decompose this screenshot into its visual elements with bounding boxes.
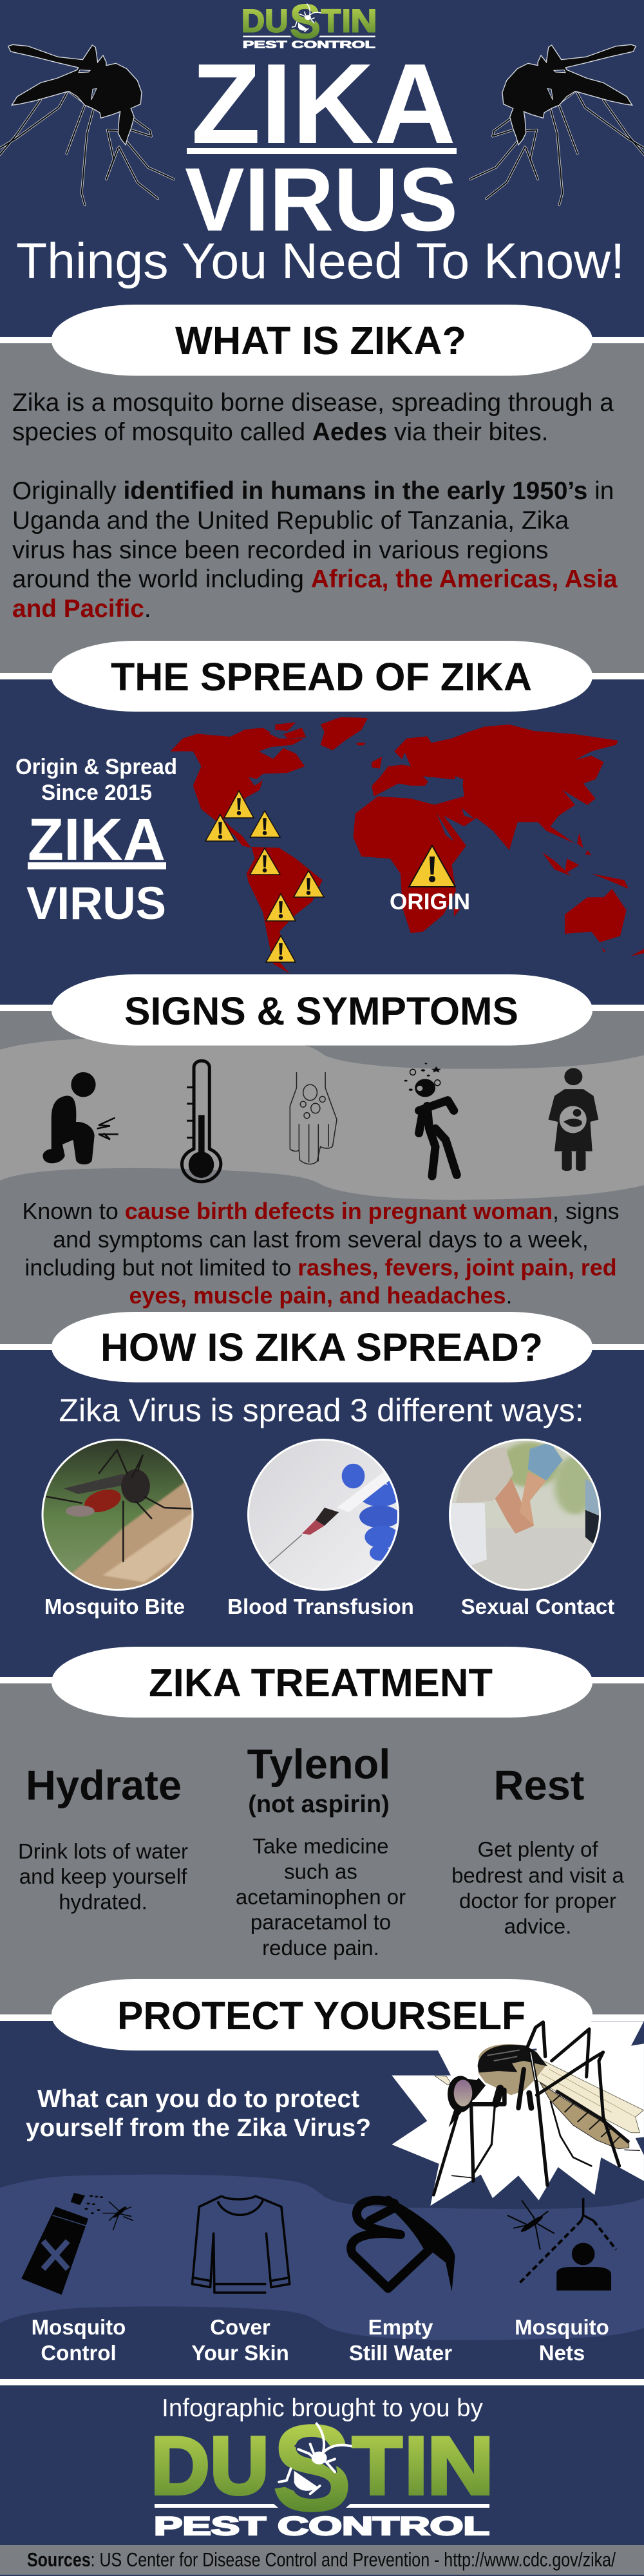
UK: [372, 757, 382, 768]
logo: Dustin Pest Control, footer: N: [427, 2420, 494, 2512]
heading pill: What is Zika: WHAT IS ZIKA?: [175, 319, 466, 363]
heading pill: The spread of Zika: [52, 641, 592, 712]
label: origin: ORIGIN: [390, 889, 470, 914]
icon: mosquito net with person: [507, 2198, 616, 2291]
starburst with mosquito: [392, 2021, 644, 2206]
photo circle: blood transfusion: [245, 1436, 402, 1594]
Australia: [565, 889, 627, 942]
South America: [247, 847, 323, 974]
labels: transmission ways: Blood Transfusion: [227, 1595, 414, 1618]
icon: empty water pitcher: [351, 2197, 455, 2291]
treatment column: Tylenol: such as: [284, 1860, 357, 1883]
Greenland: [320, 717, 368, 750]
logo: Dustin Pest Control, footer: [151, 2398, 494, 2541]
Eurasia: [372, 724, 618, 850]
starburst: [392, 2021, 644, 2206]
logo: Dustin Pest Control, header: N: [350, 2, 377, 39]
text block: what is Zika: Zika is a mosquito borne disease, spreading through a: [12, 389, 614, 417]
subtitle: Things You Need To Know!: [16, 234, 625, 289]
title: [16, 40, 625, 289]
warning triangle: USA: [224, 791, 254, 818]
text block: protect question: [26, 2085, 371, 2142]
icon: pregnant woman: [548, 1068, 598, 1171]
text block: symptoms description: [22, 1198, 620, 1309]
heading pill: How is Zika spread: HOW IS ZIKA SPREAD?: [100, 1325, 543, 1369]
heading pill: Signs and symptoms: SIGNS & SYMPTOMS: [124, 989, 518, 1033]
Africa: [354, 797, 466, 933]
North America: [171, 731, 305, 848]
heading pill: Signs and symptoms: [52, 974, 592, 1046]
text block: what is Zika: and Pacific.: [12, 595, 151, 623]
heading pill: Zika treatment: ZIKA TREATMENT: [149, 1661, 493, 1705]
treatment column: Tylenol: (not aspirin): [248, 1791, 390, 1818]
mosquito illustration: [433, 2022, 643, 2195]
logo: Dustin Pest Control, header: U: [265, 2, 288, 39]
light wave band behind symptoms: [0, 1038, 644, 1200]
heading pill: Protect yourself: PROTECT YOURSELF: [117, 1994, 526, 2038]
treatment column: Tylenol: [236, 1740, 406, 1960]
world map: [171, 717, 644, 974]
Arctic islands: [242, 723, 366, 745]
treatment column: hydrate: hydrated.: [59, 1889, 147, 1914]
warning triangle: origin: [409, 846, 455, 887]
symptoms icon row: [43, 1061, 598, 1182]
treatment column: rest: [451, 1762, 625, 1938]
labels: protection methods: Empty: [368, 2315, 433, 2339]
labels: protection methods: Nets: [539, 2341, 585, 2365]
text block: protect question: yourself from the Zika Virus?: [26, 2114, 371, 2142]
labels: protection methods: Still Water: [349, 2341, 452, 2365]
treatment column: Tylenol: Tylenol: [247, 1740, 390, 1788]
logo: Dustin Pest Control, footer: I: [404, 2420, 428, 2512]
icon: mosquito control spray: [21, 2193, 133, 2295]
text block: symptoms description: eyes, muscle pain, and headaches.: [129, 1283, 512, 1309]
heading pill: What is Zika: [52, 305, 592, 376]
text block: what is Zika: Originally identified in humans in the early 1950’s in: [12, 477, 614, 505]
treatment column: hydrate: and keep yourself: [19, 1864, 187, 1888]
labels: protection methods: Mosquito: [32, 2315, 126, 2339]
light wave band behind protection icons: [0, 2175, 644, 2340]
treatment column: hydrate: Drink lots of water: [18, 1839, 188, 1863]
labels: protection methods: Mosquito: [515, 2315, 609, 2339]
warning triangle: Brazil: [294, 871, 324, 897]
text block: origin and spread: [15, 755, 177, 929]
photo circle: sexual contact: [448, 1436, 605, 1594]
labels: protection methods: Control: [41, 2341, 117, 2365]
icon: long sleeve shirt: [192, 2196, 290, 2293]
text block: what is Zika: around the world including Africa, the Americas, Asia: [12, 565, 618, 593]
title: VIRUS: VIRUS: [185, 149, 458, 250]
labels: transmission ways: Mosquito Bite: [44, 1595, 185, 1618]
logo: Dustin Pest Control, header: PEST CONTROL: [243, 40, 375, 51]
islands: Madagascar, Southeast Asia: [454, 833, 629, 916]
treatment column: rest: Rest: [494, 1762, 584, 1808]
logo: Dustin Pest Control, footer: PEST CONTROL: [154, 2512, 489, 2541]
logo: Dustin Pest Control, footer: D: [151, 2420, 210, 2512]
text block: symptoms description: including but not limited to rashes, fevers, joint pain, red: [24, 1255, 617, 1280]
text block: what is Zika: [12, 389, 618, 623]
small VIRUS: VIRUS: [26, 878, 166, 929]
labels: protection methods: Your Skin: [191, 2341, 289, 2365]
treatment column: Tylenol: reduce pain.: [262, 1936, 379, 1960]
treatment column: Tylenol: Take medicine: [253, 1834, 388, 1858]
treatment column: Tylenol: paracetamol to: [251, 1910, 391, 1934]
title: ZIKA: ZIKA: [191, 40, 456, 167]
logo: Dustin Pest Control, footer: U: [210, 2420, 269, 2512]
text block: what is Zika: Uganda and the United Republic of Tanzania, Zika: [12, 507, 569, 535]
Tasmania and New Zealand: [601, 948, 644, 956]
warning triangle: Caribbean: [250, 811, 280, 837]
text block: what is Zika: species of mosquito called Aedes via their bites.: [12, 419, 548, 446]
photo circle: mosquito bite: [39, 1436, 196, 1594]
text block: what is Zika: virus has since been recorded in various regions: [12, 536, 548, 564]
warning triangle: Colombia: [250, 848, 280, 875]
heading pill: Zika treatment: [52, 1647, 592, 1718]
text block: protect question: What can you do to protect: [37, 2085, 359, 2113]
protection icons: [21, 2193, 616, 2295]
text block: symptoms description: and symptoms can last from several days to a week,: [53, 1227, 589, 1253]
small ZIKA underline: [28, 862, 166, 869]
logo: Dustin Pest Control, header: T: [321, 2, 341, 39]
treatment column: Tylenol: acetaminophen or: [236, 1885, 406, 1909]
labels: transmission ways: [44, 1595, 614, 1618]
treatment column: rest: doctor for proper: [459, 1889, 616, 1913]
logo: Dustin Pest Control, header: I: [342, 2, 351, 39]
icon: joint pain, kneeling person: [43, 1072, 118, 1164]
icon: rash, hand outline: [290, 1072, 337, 1164]
labels: protection methods: [32, 2315, 609, 2365]
treatment column: hydrate: Hydrate: [26, 1762, 182, 1808]
heading pill: Protect yourself: [52, 1979, 592, 2050]
small ZIKA: ZIKA: [28, 807, 166, 873]
title underline: [187, 148, 457, 154]
labels: transmission ways: Sexual Contact: [461, 1595, 614, 1618]
logo: Dustin Pest Control, footer: S: [271, 2398, 353, 2537]
logo: Dustin Pest Control, header: [242, 0, 377, 51]
icon: left mosquito silhouette: [0, 44, 174, 205]
treatment column: rest: bedrest and visit a: [451, 1864, 625, 1887]
subheading: three ways: Zika Virus is spread 3 different ways:: [59, 1392, 584, 1428]
treatment column: hydrate: [18, 1762, 188, 1914]
warning triangle: Argentina: [266, 936, 296, 962]
text block: origin and spread: Origin & Spread: [15, 755, 177, 779]
icon: right mosquito silhouette: [470, 44, 644, 205]
text block: symptoms description: Known to cause birth defects in pregnant woman, signs: [22, 1198, 620, 1224]
warning triangle: Mexico: [205, 815, 235, 841]
icon: fever, thermometer: [182, 1061, 221, 1182]
heading pill: The spread of Zika: THE SPREAD OF ZIKA: [111, 655, 532, 699]
text block: origin and spread: Since 2015: [41, 781, 152, 805]
heading pill: How is Zika spread: [52, 1312, 592, 1382]
text: infographic credit: Infographic brought to you by: [162, 2394, 484, 2422]
treatment column: rest: Get plenty of: [477, 1837, 598, 1861]
labels: protection methods: Cover: [210, 2315, 270, 2339]
logo: Dustin Pest Control, header: D: [242, 2, 265, 39]
warning markers on map: [205, 791, 455, 962]
logo: Dustin Pest Control, footer: T: [352, 2420, 402, 2512]
icon: headache, dizzy figure: [404, 1063, 457, 1176]
warning triangle: Bolivia: [266, 894, 296, 921]
treatment column: rest: advice.: [504, 1914, 571, 1938]
